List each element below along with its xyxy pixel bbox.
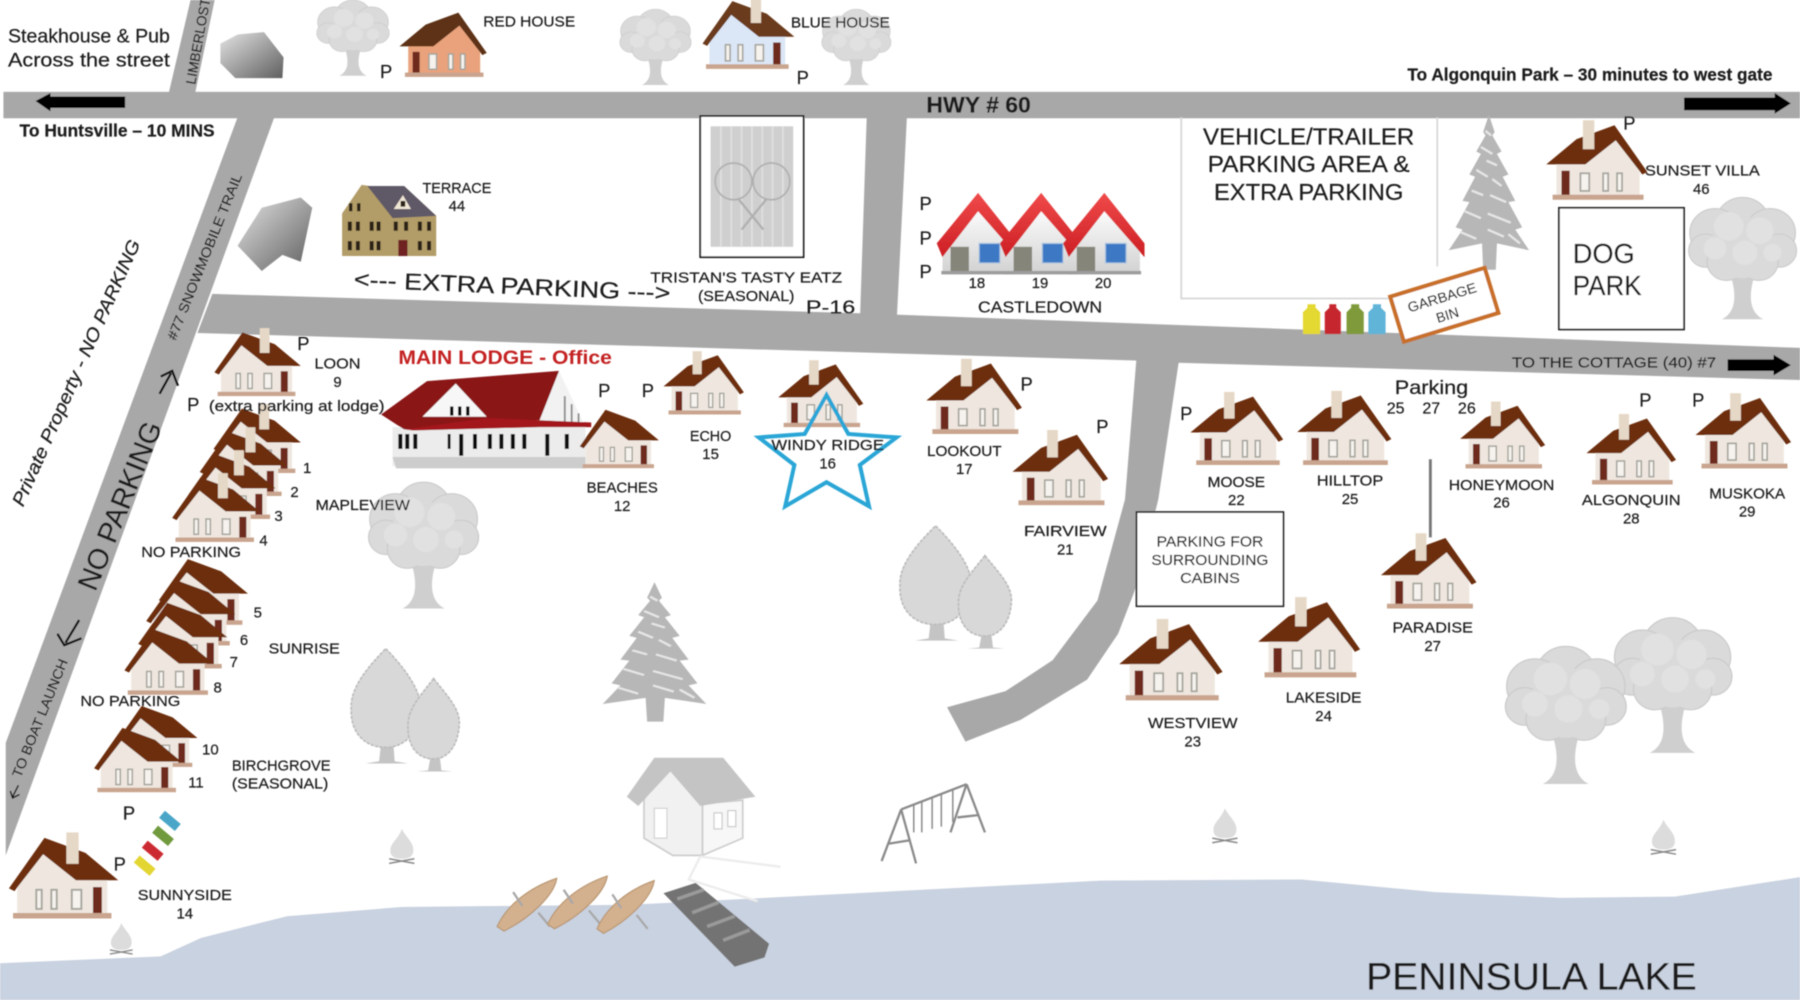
cabin: Blue House bbox=[703, 0, 890, 88]
text: road private property: Private Property - NO PARKING bbox=[7, 236, 144, 509]
cabin: Sunnyside 14: SUNNYSIDE bbox=[138, 887, 232, 904]
cabin: Beaches 12: 12 bbox=[614, 498, 630, 515]
path: line to Paradise bbox=[1429, 459, 1432, 537]
cabins: Sunrise 5-8: 6 bbox=[240, 632, 248, 649]
cabin: Muskoka 29: MUSKOKA bbox=[1709, 485, 1785, 502]
cabins: Mapleview 1-4: 2 bbox=[290, 484, 299, 501]
label: P beside lodge: P bbox=[598, 380, 610, 401]
campfire 4 bbox=[1651, 820, 1676, 854]
cabin: Moose 22: 22 bbox=[1228, 492, 1245, 509]
icon: kayaks bbox=[134, 811, 181, 876]
cabins: Castledown 18-20 bbox=[920, 193, 1145, 316]
label: P beside lodge bbox=[598, 380, 654, 401]
cabins: Sunrise 5-8: SUNRISE bbox=[269, 640, 340, 657]
cabins: Mapleview 1-4: 1 bbox=[303, 460, 311, 477]
label: extra parking at lodge: (extra parking at lodge) bbox=[209, 398, 385, 415]
box: vehicle trailer parking: PARKING AREA & bbox=[1208, 151, 1410, 177]
label: P beside lodge: P bbox=[642, 380, 654, 401]
cabin: Sunnyside 14: 14 bbox=[177, 905, 193, 922]
cabins: Castledown 18-20: 19 bbox=[1032, 275, 1048, 292]
top-left text: steakhouse: Steakhouse & Pub bbox=[8, 25, 170, 47]
tree: north pine bbox=[1449, 115, 1529, 270]
top-left text: steakhouse: Across the street bbox=[8, 50, 171, 72]
cabin: Sunset Villa 46: 46 bbox=[1693, 181, 1710, 198]
cabin: Muskoka 29 bbox=[1692, 389, 1791, 521]
tree: north oak 1 bbox=[317, 0, 389, 76]
direction text: Algonquin Park: To Algonquin Park – 30 minutes to west gate bbox=[1407, 64, 1772, 84]
swing set bbox=[882, 784, 985, 863]
tree: north oak 3 bbox=[822, 9, 891, 85]
box: vehicle trailer parking: VEHICLE/TRAILER bbox=[1203, 124, 1414, 150]
cabins: Birchgrove 10-11 bbox=[94, 706, 331, 793]
boat shed bbox=[627, 758, 755, 855]
arrow: to the cottage bbox=[1728, 355, 1791, 375]
cabin: Blue House: BLUE HOUSE bbox=[791, 15, 890, 32]
direction text: Huntsville: To Huntsville – 10 MINS bbox=[20, 121, 215, 141]
cabins: Sunrise 5-8: 8 bbox=[214, 679, 222, 696]
tree: dog park oak bbox=[1689, 197, 1797, 319]
cabin: Moose 22: MOOSE bbox=[1208, 474, 1265, 491]
arrow: trail south bbox=[57, 620, 82, 645]
label: Tristan's Tasty Eatz: TRISTAN'S TASTY EATZ bbox=[650, 269, 842, 286]
cabin: Sunset Villa 46: P bbox=[1623, 113, 1635, 134]
cabin: Moose 22 bbox=[1180, 392, 1283, 509]
text: snowmobile trail: #77 SNOWMOBILE TRAIL bbox=[165, 171, 245, 342]
cabin: Lakeside 24: LAKESIDE bbox=[1286, 690, 1362, 707]
cabin: Honeymoon 26: HONEYMOON bbox=[1449, 477, 1554, 494]
cabin: Loon 9: 9 bbox=[333, 374, 342, 391]
campfire 1 bbox=[110, 923, 133, 954]
icon: garbage bins bbox=[1303, 304, 1386, 334]
cabin: Fairview 21: P bbox=[1096, 416, 1109, 437]
cabin: Beaches 12 bbox=[580, 410, 659, 515]
cabin: Honeymoon 26: 26 bbox=[1493, 494, 1510, 511]
cabin: Echo 15: 15 bbox=[702, 446, 719, 463]
text: boat launch: TO BOAT LAUNCH bbox=[10, 657, 71, 780]
road: cross road bbox=[197, 294, 1800, 380]
box: dog park: DOG bbox=[1573, 238, 1635, 269]
text: extra parking: <--- EXTRA PARKING ---> bbox=[353, 266, 671, 306]
label: P-16: P-16 bbox=[806, 296, 855, 317]
cabins: Castledown 18-20: P bbox=[920, 193, 932, 214]
cabin: Windy Ridge 16: 16 bbox=[819, 455, 836, 472]
cabin: Windy Ridge 16: WINDY RIDGE bbox=[771, 437, 884, 454]
label: parking numbers: 26 bbox=[1458, 399, 1476, 417]
sign: garbage bin: BIN bbox=[1434, 305, 1461, 326]
cabins: Castledown 18-20: 18 bbox=[969, 275, 985, 292]
pale arrow to dock bbox=[689, 856, 781, 901]
road: Highway 60 bbox=[3, 92, 1800, 118]
text: no parking on road: NO PARKING bbox=[72, 417, 169, 595]
cabin: Muskoka 29: P bbox=[1692, 389, 1704, 410]
cabin: Red House bbox=[380, 13, 575, 82]
cabin: Lakeside 24: 24 bbox=[1315, 708, 1332, 725]
cabin: Algonquin 28 bbox=[1582, 389, 1681, 528]
road: Snowmobile trail bbox=[6, 117, 274, 855]
arrow: east on highway bbox=[1684, 93, 1791, 114]
box: parking for surrounding cabins: SURROUNDING bbox=[1151, 552, 1268, 569]
label: Tristan's Tasty Eatz: (SEASONAL) bbox=[698, 288, 794, 305]
tree: central pine bbox=[603, 582, 706, 722]
cabin: Terrace 44: TERRACE bbox=[422, 180, 491, 197]
campfire 3 bbox=[1212, 808, 1238, 843]
cabins: Sunrise 5-8: 7 bbox=[230, 654, 238, 671]
cabin: Sunnyside 14: P bbox=[114, 853, 126, 874]
cabins: Sunrise 5-8 bbox=[124, 559, 340, 696]
arrow: west on highway bbox=[36, 93, 125, 111]
cabin: Paradise 27: 27 bbox=[1424, 638, 1441, 655]
label: no parking 2: NO PARKING bbox=[80, 693, 180, 710]
tree: south-east oak 1 bbox=[1613, 618, 1732, 753]
lake bbox=[0, 877, 1800, 1000]
label: extra parking at lodge: P bbox=[187, 394, 199, 415]
trees: pair near Fairview bbox=[900, 526, 1011, 649]
arrow: trail north bbox=[160, 371, 178, 394]
label: main lodge: MAIN LODGE - Office bbox=[398, 347, 612, 369]
tennis court bbox=[700, 116, 804, 257]
cabins: Birchgrove 10-11: 10 bbox=[202, 741, 219, 758]
cabins: Birchgrove 10-11: 11 bbox=[188, 775, 204, 792]
cabin: Echo 15 bbox=[664, 351, 744, 463]
cabin: Echo 15: ECHO bbox=[690, 428, 731, 445]
cabin: Red House: RED HOUSE bbox=[483, 13, 575, 30]
campfire 2 bbox=[389, 829, 414, 863]
cabins: Mapleview 1-4 bbox=[172, 404, 411, 549]
cabin: Lakeside 24 bbox=[1258, 597, 1362, 725]
cabin: Terrace 44 bbox=[342, 180, 491, 256]
box: parking for surrounding cabins: PARKING FOR bbox=[1157, 533, 1264, 550]
cabin: Loon 9: LOON bbox=[315, 356, 360, 373]
trees: pair near Sunrise bbox=[351, 649, 459, 772]
arrow: boat launch bbox=[10, 785, 20, 798]
cabin: Sunset Villa 46 bbox=[1546, 113, 1760, 200]
cabin: Sunnyside 14 bbox=[9, 832, 232, 922]
cabin: Fairview 21: 21 bbox=[1057, 542, 1074, 559]
cabin: Algonquin 28: ALGONQUIN bbox=[1582, 492, 1681, 509]
dock bbox=[664, 883, 769, 967]
cabin: Blue House: P bbox=[797, 67, 809, 88]
cabin: Westview 23 bbox=[1119, 619, 1239, 750]
cabins: Castledown 18-20: P bbox=[920, 261, 932, 282]
cabins: Birchgrove 10-11: (SEASONAL) bbox=[232, 776, 328, 793]
label: P at birchgrove: P bbox=[123, 803, 135, 824]
label: parking numbers: 27 bbox=[1422, 399, 1440, 417]
cabin: Paradise 27: PARADISE bbox=[1392, 620, 1473, 637]
road: connector from highway bbox=[860, 117, 907, 324]
box: parking for surrounding cabins: CABINS bbox=[1180, 570, 1240, 587]
box: dog park: PARK bbox=[1573, 270, 1642, 301]
cabin: Hilltop 25: HILLTOP bbox=[1317, 473, 1383, 490]
cabins: Castledown 18-20: 20 bbox=[1095, 275, 1111, 292]
cabin: Paradise 27 bbox=[1381, 533, 1477, 655]
label: no parking 1: NO PARKING bbox=[141, 544, 241, 561]
cabin: Red House: P bbox=[380, 61, 392, 82]
cabin: Lookout 17 bbox=[926, 359, 1033, 478]
box: dog park bbox=[1559, 208, 1684, 330]
label: Tristan's Tasty Eatz bbox=[650, 269, 842, 305]
label: parking numbers: 25 bbox=[1387, 399, 1405, 417]
cabin: Sunset Villa 46: SUNSET VILLA bbox=[1645, 163, 1760, 180]
cabin: Lookout 17: P bbox=[1021, 373, 1033, 394]
cabin: Beaches 12: BEACHES bbox=[587, 480, 658, 497]
cabin: Loon 9 bbox=[214, 328, 360, 396]
tree: mapleview oak bbox=[369, 482, 479, 608]
box: parking for surrounding cabins bbox=[1136, 512, 1283, 606]
cabin: Hilltop 25 bbox=[1297, 391, 1391, 508]
cabin: Fairview 21: FAIRVIEW bbox=[1024, 523, 1108, 540]
label: extra parking at lodge bbox=[187, 394, 385, 415]
main lodge building bbox=[381, 371, 591, 468]
cabin: Algonquin 28: 28 bbox=[1623, 511, 1640, 528]
tree: south-east oak 2 bbox=[1505, 646, 1626, 784]
box: vehicle trailer parking: EXTRA PARKING bbox=[1214, 179, 1403, 205]
cabins: Castledown 18-20: P bbox=[920, 228, 932, 249]
label: to the cottage: TO THE COTTAGE (40) #7 bbox=[1512, 354, 1716, 371]
cabin: Honeymoon 26 bbox=[1449, 402, 1554, 511]
cabins: Mapleview 1-4: MAPLEVIEW bbox=[316, 497, 411, 514]
sign: garbage bin bbox=[1390, 268, 1498, 342]
cabin: Lookout 17: LOOKOUT bbox=[927, 443, 1002, 460]
road label: HWY 60: HWY # 60 bbox=[926, 93, 1031, 118]
cabin: Algonquin 28: P bbox=[1639, 389, 1652, 410]
building: grey outbuilding terrace bbox=[238, 197, 312, 271]
cabin: Muskoka 29: 29 bbox=[1739, 504, 1755, 521]
cabin: Westview 23: WESTVIEW bbox=[1148, 715, 1239, 732]
cabins: Castledown 18-20: CASTLEDOWN bbox=[978, 298, 1102, 316]
cabins: Mapleview 1-4: 3 bbox=[274, 508, 283, 525]
cabin: Lookout 17: 17 bbox=[956, 461, 973, 478]
cabins: Sunrise 5-8: 5 bbox=[254, 605, 262, 622]
tree: north oak 2 bbox=[620, 9, 691, 85]
cabin: Loon 9: P bbox=[297, 333, 310, 354]
cabin: Windy Ridge 16 bbox=[759, 360, 897, 506]
cabin: Hilltop 25: 25 bbox=[1342, 491, 1358, 508]
road: Limberlost bbox=[169, 0, 215, 93]
cabin: Fairview 21 bbox=[1012, 416, 1109, 559]
cabins: Birchgrove 10-11: BIRCHGROVE bbox=[232, 757, 331, 774]
label: parking numbers: Parking bbox=[1395, 377, 1468, 399]
cabin: Terrace 44: 44 bbox=[449, 198, 465, 215]
label: Peninsula Lake: PENINSULA LAKE bbox=[1366, 957, 1697, 999]
cabins: Mapleview 1-4: 4 bbox=[259, 532, 268, 549]
cabin: Moose 22: P bbox=[1180, 403, 1192, 424]
boats bbox=[497, 876, 654, 933]
sign: garbage bin: GARBAGE bbox=[1406, 280, 1478, 315]
cabin: Westview 23: 23 bbox=[1184, 733, 1201, 750]
building: grey outbuilding north bbox=[220, 32, 284, 78]
label: parking numbers bbox=[1387, 377, 1476, 417]
box: vehicle trailer parking bbox=[1181, 117, 1437, 299]
road: curved lane bbox=[947, 358, 1179, 742]
